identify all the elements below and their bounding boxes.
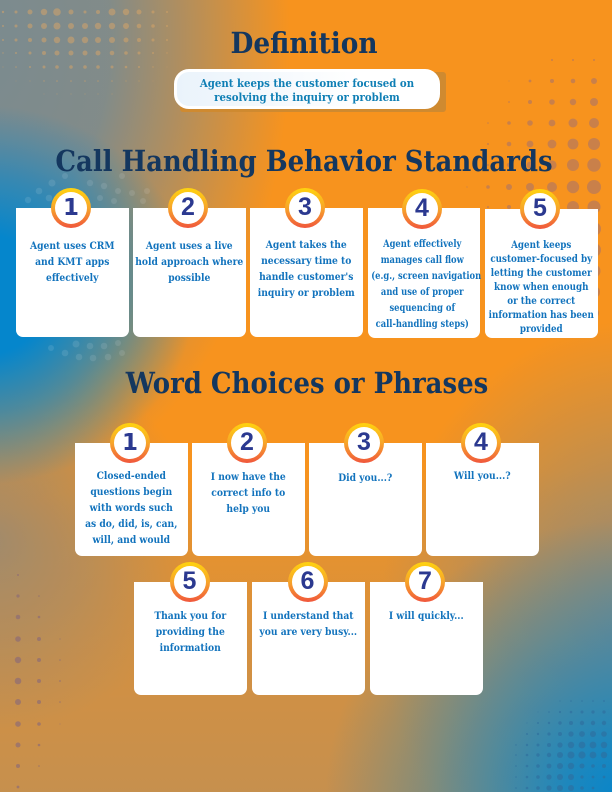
panel: phrase 5: information <box>160 642 221 654</box>
panel: phrase 1: questions begin <box>90 486 172 498</box>
number badge 1 <box>110 423 150 463</box>
callout shadow <box>180 72 446 112</box>
panel: behavior standard 5: provided <box>520 323 563 335</box>
number badge 3: 3 <box>298 193 312 221</box>
number badge 2 <box>227 423 267 463</box>
number badge 4 <box>402 188 442 228</box>
title: Definition: Definition <box>230 26 378 60</box>
panel: behavior standard 3: handle customer's <box>259 271 354 283</box>
callout pill <box>174 69 440 109</box>
number badge 6: 6 <box>301 567 314 595</box>
callout text: resolving the inquiry or problem <box>214 90 400 104</box>
panel: behavior standard 3 <box>250 208 363 337</box>
panel: behavior standard 4: call-handling steps) <box>376 318 469 330</box>
number badge 6 <box>288 562 328 602</box>
heading: Word Choices or Phrases: Word Choices or Phrases <box>126 366 488 400</box>
panel: behavior standard 4: manages call flow <box>381 254 464 266</box>
panel: phrase 1: Closed-ended <box>97 470 166 482</box>
panel: behavior standard 5: know when enough <box>494 281 589 293</box>
panel: phrase 1: with words such <box>90 502 173 514</box>
panel: behavior standard 4: Agent effectively <box>383 238 461 250</box>
panel: behavior standard 5: customer-focused by <box>491 253 592 265</box>
panel: behavior standard 5: Agent keeps <box>511 239 572 251</box>
heading: Call Handling Behavior Standards: Call Handling Behavior Standards <box>55 144 553 178</box>
number badge 3 <box>285 188 325 228</box>
panel: behavior standard 2: possible <box>169 272 211 284</box>
panel: phrase 5: providing the <box>156 626 225 638</box>
panel: phrase 1: will, and would <box>92 534 170 546</box>
number badge 2 <box>168 188 208 228</box>
panel: behavior standard 5: letting the customer <box>491 267 592 279</box>
panel: behavior standard 3: inquiry or problem <box>258 287 355 299</box>
number badge 7 <box>405 562 445 602</box>
panel: phrase 5 <box>134 582 247 695</box>
number badge 5 <box>170 562 210 602</box>
panel: behavior standard 5 <box>485 209 598 338</box>
number badge 7: 7 <box>418 567 432 595</box>
panel: behavior standard 4 <box>368 208 480 338</box>
panel: behavior standard 1: Agent uses CRM <box>30 240 115 252</box>
number badge 3 <box>344 423 384 463</box>
panel: phrase 6: you are very busy... <box>260 626 357 638</box>
panel: behavior standard 5: or the correct <box>507 295 575 307</box>
panel: phrase 4 <box>426 443 538 556</box>
panel: phrase 2: I now have the <box>211 471 286 483</box>
number badge 3: 3 <box>357 428 371 456</box>
panel: phrase 1 <box>75 443 188 556</box>
panel: behavior standard 3: necessary time to <box>261 255 352 267</box>
number badge 1: 1 <box>63 195 79 221</box>
number badge 4 <box>461 423 501 463</box>
panel: behavior standard 5: information has been <box>489 309 594 321</box>
panel: behavior standard 4: and use of proper <box>381 286 464 298</box>
number badge 1: 1 <box>122 430 138 456</box>
panel: phrase 6 <box>252 582 365 695</box>
panel: behavior standard 4: (e.g., screen navigation <box>371 270 481 282</box>
panel: phrase 3 <box>309 443 422 556</box>
panel: phrase 6: I understand that <box>263 610 354 622</box>
panel: phrase 7 <box>370 582 483 695</box>
panel: behavior standard 1: and KMT apps <box>35 256 109 268</box>
panel: phrase 2: correct info to <box>211 487 285 499</box>
panel: behavior standard 2: Agent uses a live <box>146 240 233 252</box>
number badge 5: 5 <box>533 194 547 222</box>
number badge 4: 4 <box>474 428 488 456</box>
number badge 5: 5 <box>183 567 196 595</box>
panel: behavior standard 2 <box>133 208 246 337</box>
number badge 5 <box>520 189 560 229</box>
panel: behavior standard 1 <box>16 208 128 337</box>
panel: behavior standard 4: sequencing of <box>390 302 455 314</box>
number badge 2: 2 <box>240 428 254 456</box>
panel: phrase 2: help you <box>226 503 270 515</box>
number badge 2: 2 <box>181 193 195 221</box>
panel: phrase 7: I will quickly... <box>389 610 464 622</box>
panel: phrase 5: Thank you for <box>155 610 226 622</box>
callout text <box>200 76 414 104</box>
panel: behavior standard 2: hold approach where <box>136 256 244 268</box>
panel: behavior standard 1: effectively <box>46 272 98 284</box>
panel: phrase 3: Did you...? <box>338 472 392 484</box>
panel: phrase 2 <box>192 443 304 556</box>
definition callout <box>174 69 446 112</box>
callout text: Agent keeps the customer focused on <box>200 76 414 90</box>
panel: phrase 1: as do, did, is, can, <box>85 518 177 530</box>
number badge 1 <box>51 188 91 228</box>
number badge 4: 4 <box>415 194 429 222</box>
panel: behavior standard 3: Agent takes the <box>266 239 347 251</box>
panel: phrase 4: Will you...? <box>454 470 511 482</box>
